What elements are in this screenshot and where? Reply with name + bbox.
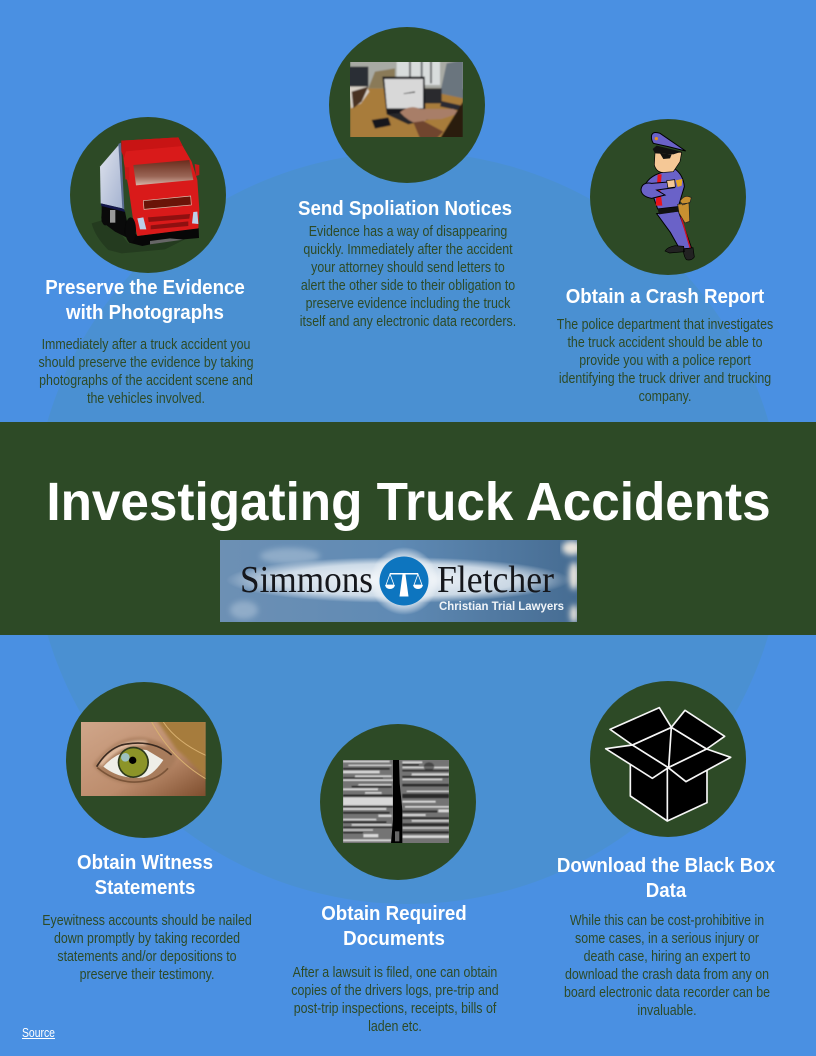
heading: Obtain Required Documents: Documents <box>343 928 445 950</box>
text: Obtain Witness Statements: Eyewitness accounts should be nailed <box>42 913 252 929</box>
holster <box>678 196 691 223</box>
arms <box>641 182 674 198</box>
icon: police officer <box>590 119 746 275</box>
text: Preserve the Evidence: should preserve the evidence by taking <box>38 355 254 371</box>
text: Obtain Required Documents <box>291 965 499 1035</box>
text: Obtain a Crash Report: The police department that investigates <box>557 317 773 333</box>
heading: Preserve the Evidence: with Photographs <box>66 302 224 324</box>
text: Send Spoliation Notices <box>300 224 516 330</box>
heading: Obtain a Crash Report: Obtain a Crash Report <box>566 286 764 308</box>
text: Send Spoliation Notices: Evidence has a way of disappearing <box>309 224 507 240</box>
heading: Preserve the Evidence <box>45 277 245 324</box>
text: Download the Black Box Data: board electronic data recorder can be <box>564 985 770 1001</box>
text: Obtain a Crash Report <box>557 317 773 405</box>
title: Investigating Truck Accidents <box>46 472 771 532</box>
heading: Download the Black Box Data: Data <box>646 880 686 902</box>
text: Download the Black Box Data: invaluable. <box>637 1003 697 1019</box>
text: Obtain Witness Statements <box>42 913 252 983</box>
text: Obtain Witness Statements: preserve their testimony. <box>80 967 214 983</box>
cap <box>651 132 686 151</box>
logo: Simmons Fletcher: Fletcher <box>437 559 554 601</box>
text: Obtain Witness Statements: statements and/or depositions to <box>57 949 237 965</box>
logo: Simmons Fletcher: Christian Trial Lawyers <box>439 599 564 613</box>
text: Download the Black Box Data: While this can be cost-prohibitive in <box>570 913 764 929</box>
heading: Obtain Required Documents: Obtain Required <box>321 903 467 925</box>
text: Obtain Required Documents: post-trip inspections, receipts, bills of <box>294 1001 496 1017</box>
icon: eye photo <box>66 682 222 838</box>
text: Send Spoliation Notices: your attorney should send letters to <box>311 260 505 276</box>
text: Preserve the Evidence: photographs of the accident scene and <box>39 373 253 389</box>
text: Download the Black Box Data <box>564 913 770 1019</box>
text: Obtain Required Documents: laden etc. <box>368 1019 422 1035</box>
logo seal <box>380 556 428 606</box>
text: Send Spoliation Notices: quickly. Immediately after the accident <box>303 242 513 258</box>
text: Obtain Required Documents: copies of the drivers logs, pre-trip and <box>291 983 499 999</box>
heading: Download the Black Box Data: Download the Black Box <box>557 855 775 877</box>
icon: stacked documents photo <box>320 724 476 880</box>
icon: open box <box>590 681 746 837</box>
logo: Simmons Fletcher <box>220 540 577 622</box>
heading: Obtain Required Documents <box>321 903 467 950</box>
paper stacks <box>343 760 449 843</box>
icon: laptop photo <box>329 27 485 183</box>
shoes <box>665 246 694 260</box>
text: Download the Black Box Data: some cases, in a serious injury or <box>575 931 759 947</box>
text: Send Spoliation Notices: alert the other side to their obligation to <box>301 278 515 294</box>
source link: Source <box>22 1025 55 1040</box>
heading: Download the Black Box Data <box>557 855 775 902</box>
text: Obtain a Crash Report: identifying the truck driver and trucking <box>559 371 771 387</box>
text: Obtain Required Documents: After a lawsuit is filed, one can obtain <box>293 965 497 981</box>
text: Obtain a Crash Report: company. <box>639 389 691 405</box>
trousers <box>657 211 692 249</box>
logo wordmark: Simmons <box>240 559 373 601</box>
text: Download the Black Box Data: death case, hiring an expert to <box>584 949 750 965</box>
text: Obtain Witness Statements: down promptly by taking recorded <box>54 931 240 947</box>
text: Send Spoliation Notices: itself and any electronic data recorders. <box>300 314 516 330</box>
text: Obtain a Crash Report: provide you with a police report <box>579 353 751 369</box>
badge <box>676 179 682 187</box>
text: Download the Black Box Data: download the crash data from any on <box>565 967 769 983</box>
text: Preserve the Evidence: Immediately after a truck accident you <box>42 337 250 353</box>
heading: Obtain Witness Statements: Obtain Witness <box>77 852 213 874</box>
text: Preserve the Evidence: the vehicles involved. <box>87 391 205 407</box>
belt <box>658 207 678 214</box>
torso <box>645 169 684 209</box>
heading: Obtain Witness Statements: Statements <box>95 877 195 899</box>
title band <box>0 422 816 635</box>
icon: truck <box>70 117 226 273</box>
head <box>654 152 682 172</box>
text: Obtain a Crash Report: the truck accident should be able to <box>567 335 763 351</box>
heading: Preserve the Evidence: Preserve the Evidence <box>45 277 245 299</box>
text: Preserve the Evidence <box>38 337 254 407</box>
heading: Send Spoliation Notices: Send Spoliation Notices <box>298 198 512 220</box>
tie <box>656 174 662 206</box>
text: Send Spoliation Notices: preserve evidence including the truck <box>306 296 510 312</box>
heading: Obtain Witness Statements <box>77 852 213 899</box>
